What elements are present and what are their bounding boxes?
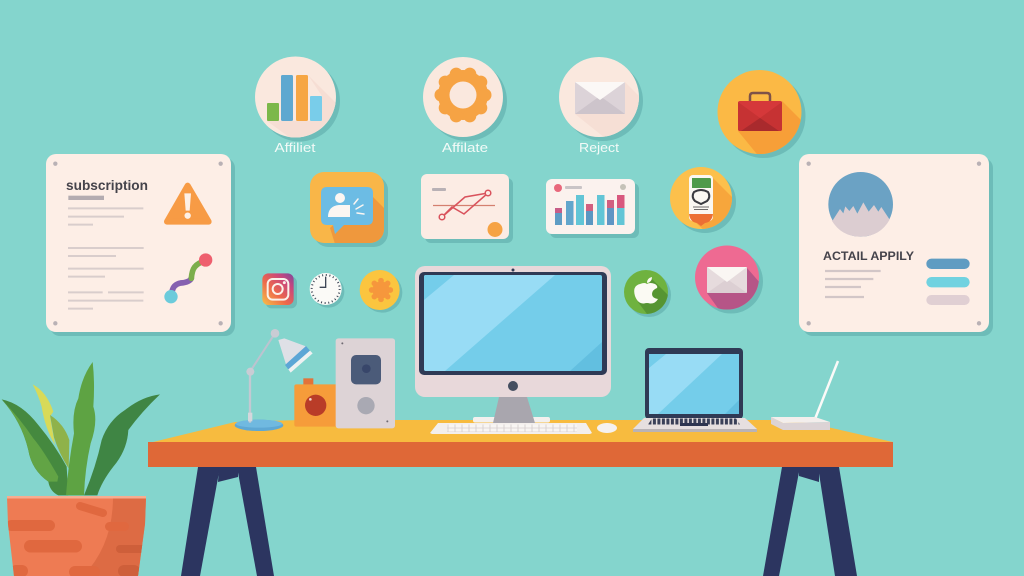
icon: yellow gear circle — [360, 270, 402, 313]
avatar image circle — [828, 172, 893, 237]
icon: chat app tile — [310, 172, 388, 247]
icon: instagram — [262, 273, 297, 308]
keyboard — [430, 423, 592, 434]
monitor stand — [473, 397, 550, 423]
laptop — [633, 348, 757, 432]
card: line chart — [421, 174, 513, 243]
desk front — [148, 442, 893, 467]
icon: gear circle — [423, 57, 507, 141]
icon: bar chart circle — [255, 56, 345, 145]
desk top — [153, 420, 893, 442]
icon: warning triangle — [167, 186, 209, 222]
label: Reject: Reject — [579, 140, 619, 155]
icon: route line — [164, 253, 212, 303]
plant — [2, 362, 160, 495]
monitor — [415, 266, 611, 423]
panel: subscription document — [46, 154, 235, 336]
panel: actail apply document — [799, 154, 993, 336]
text lines and pills — [806, 161, 981, 325]
icon: pink mail circle — [695, 246, 763, 314]
router with antenna — [771, 361, 838, 430]
icon: envelope circle — [559, 57, 643, 141]
label: Affilate: Affilate — [442, 140, 488, 155]
desk legs left — [181, 467, 274, 576]
icon: briefcase circle — [718, 70, 806, 158]
speaker device — [336, 338, 395, 428]
label: Affiliet: Affiliet — [274, 140, 316, 155]
icon: phone app circle — [670, 167, 736, 233]
heading: subscription: subscription — [66, 178, 148, 193]
card: bar dashboard — [546, 179, 639, 238]
camera — [294, 378, 338, 427]
mouse — [597, 423, 617, 433]
text lines — [53, 161, 223, 325]
heading: ACTAIL APPILY: ACTAIL APPILY — [823, 249, 914, 263]
lamp — [235, 329, 313, 431]
desk legs right — [763, 467, 857, 576]
icon: green apple circle — [624, 270, 672, 318]
flower pot — [6, 496, 150, 576]
icon: clock — [310, 273, 344, 308]
